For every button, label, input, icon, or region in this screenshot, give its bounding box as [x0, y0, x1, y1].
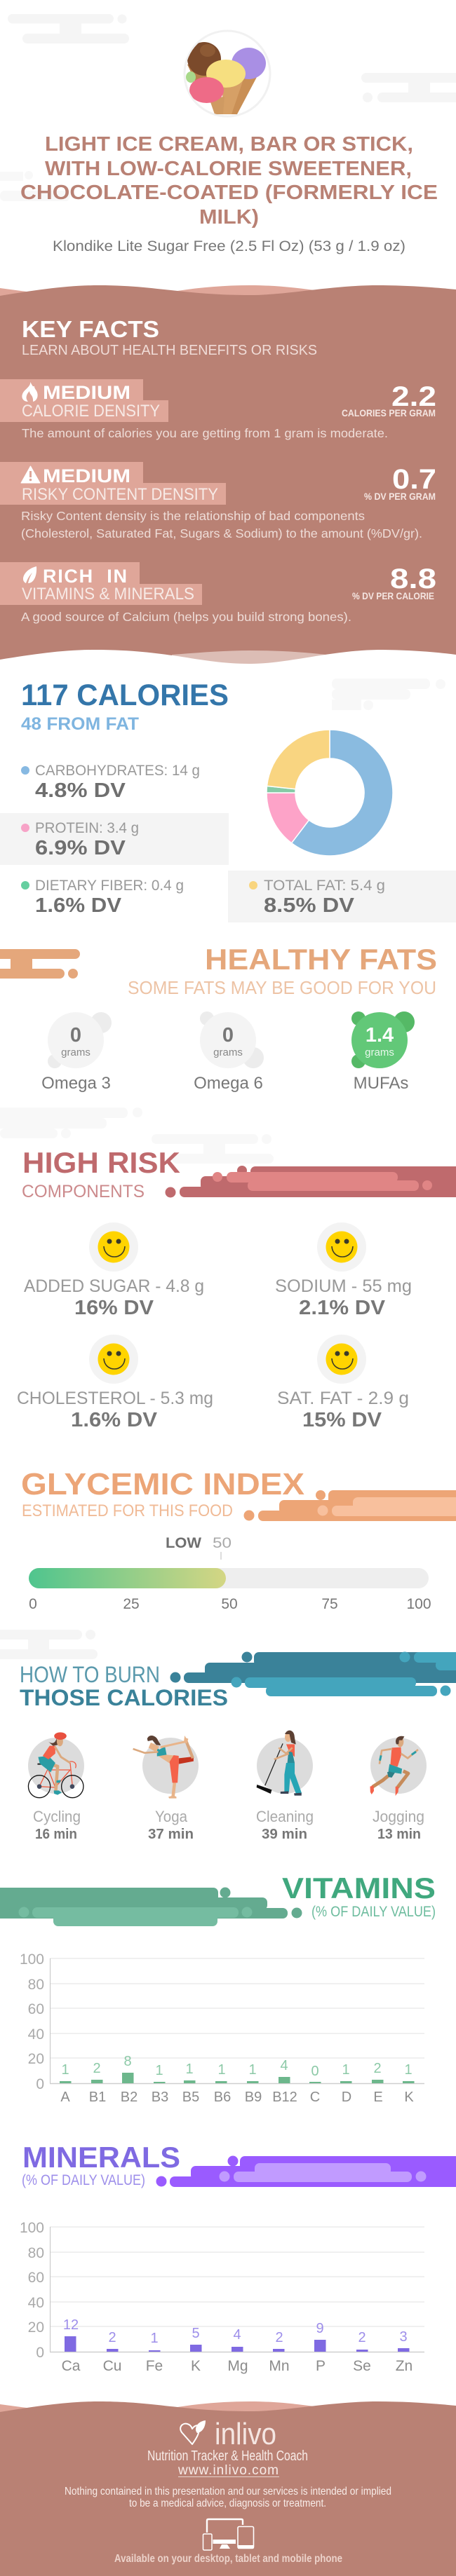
food photo: ice cream cones: [185, 31, 270, 116]
bar chart: vitamins: 60: [28, 2001, 44, 2017]
bar chart: minerals: Fe: [146, 2358, 163, 2374]
risk item: saturated fat: [277, 1335, 409, 1431]
fact: risky content density: 0.7: [392, 464, 436, 495]
availability note: Available on your desktop, tablet and mobile phone: [114, 2553, 342, 2565]
bar chart: vitamins: B1: [89, 2090, 106, 2105]
icon: yoga pose: [133, 1736, 199, 1799]
tagline: Nutrition Tracker & Health Coach: [147, 2448, 308, 2464]
risk item: added sugar: 16% DV: [74, 1297, 154, 1319]
fact: risky content density: MEDIUM: [43, 465, 130, 486]
bar chart: vitamins: 1: [404, 2062, 413, 2078]
bar chart: minerals: 0: [36, 2345, 44, 2361]
icon: warning triangle: [21, 466, 40, 483]
decorative band: burn: [170, 1651, 456, 1696]
fact: rich in vitamins and minerals: [0, 562, 436, 624]
fact: rich in vitamins and minerals: A good source of Calcium (helps you build strong bones).: [21, 610, 351, 624]
logo: inlivo: [180, 2417, 276, 2451]
bar chart: minerals: 2: [275, 2330, 283, 2345]
panel: key facts: [0, 285, 456, 673]
activity: cleaning: Cleaning: [256, 1808, 314, 1825]
bar chart: vitamins: D: [342, 2090, 351, 2105]
bar chart: vitamins: 2: [373, 2061, 382, 2076]
activity: cleaning: [256, 1731, 314, 1842]
risk item: added sugar: ADDED SUGAR - 4.8 g: [24, 1276, 204, 1296]
bar chart: vitamins: 1: [185, 2062, 194, 2077]
bar chart: minerals: Zn: [396, 2358, 413, 2374]
bar chart: minerals: 20: [28, 2319, 44, 2336]
bar chart: vitamins: B6: [214, 2090, 231, 2105]
bar chart: vitamins: 1: [217, 2062, 226, 2078]
decorative band: high risk: [166, 1166, 456, 1197]
stat: omega 3: Omega 3: [41, 1074, 111, 1093]
bar chart: vitamins: 1: [155, 2063, 163, 2078]
bar chart: minerals: 2: [108, 2330, 116, 2345]
panel: glycemic index: [21, 1467, 456, 1612]
subheading: 48 from fat: 48 FROM FAT: [21, 714, 139, 734]
disclaimer: to be a medical advice, diagnosis or treatment.: [129, 2497, 326, 2509]
bar chart: vitamins: 0: [311, 2064, 319, 2079]
fact: risky content density: RISKY CONTENT DENSITY: [22, 485, 218, 504]
bar chart: minerals: 2: [358, 2330, 366, 2345]
risk item: sodium: SODIUM - 55 mg: [275, 1276, 412, 1296]
heading: high risk: HIGH RISK: [22, 1146, 180, 1179]
bar chart: minerals: 4: [233, 2327, 241, 2343]
bar chart: minerals: 100: [20, 2220, 44, 2236]
disclaimer: [65, 2486, 391, 2509]
stat: omega 3: 0: [70, 1024, 81, 1047]
bar chart: vitamins: 1: [61, 2062, 69, 2078]
heading: how to burn those calories: [20, 1662, 228, 1710]
icon: smiley: [317, 1222, 366, 1272]
bar chart: vitamins: E: [373, 2090, 383, 2105]
website link: www.inlivo.com: [177, 2463, 279, 2478]
bar chart: vitamins: 8: [123, 2054, 132, 2069]
donut chart: macronutrients: [267, 730, 393, 856]
bar chart: minerals: 60: [28, 2270, 44, 2286]
activity: jogging: [370, 1736, 427, 1842]
subtitle: serving size: Klondike Lite Sugar Free (2.5 Fl Oz) (53 g / 1.9 oz): [53, 238, 405, 254]
legend: protein: PROTEIN: 3.4 g: [35, 820, 139, 836]
subheading: estimated: ESTIMATED FOR THIS FOOD: [22, 1501, 233, 1520]
marker: low 50: LOW: [166, 1535, 201, 1551]
bar chart: vitamins: 2: [93, 2061, 101, 2076]
bar chart: minerals: 40: [28, 2295, 44, 2311]
legend: carbohydrates: [21, 763, 200, 802]
disclaimer: Nothing contained in this presentation and our services is intended or implied: [65, 2486, 391, 2497]
activity: jogging: Jogging: [373, 1808, 424, 1825]
subheading: learn about health: LEARN ABOUT HEALTH BENEFITS OR RISKS: [22, 343, 317, 358]
fact: rich in vitamins and minerals: % DV PER CALORIE: [352, 590, 434, 601]
fact: risky content density: (Cholesterol, Saturated Fat, Sugars & Sodium) to the amount (%DV/gr).: [21, 526, 422, 540]
marker: low 50: [166, 1535, 232, 1560]
activity: cycling: Cycling: [33, 1808, 81, 1825]
icon: devices: [203, 2519, 254, 2550]
marker: low 50: 50: [213, 1535, 232, 1551]
gauge scale: 25: [123, 1596, 140, 1612]
gauge bar: [29, 1568, 429, 1588]
title: WITH LOW-CALORIE SWEETENER,: [45, 158, 412, 180]
activity: yoga: Yoga: [155, 1808, 188, 1825]
bar chart: minerals: Cu: [103, 2358, 121, 2374]
fact: risky content density: % DV PER GRAM: [364, 491, 436, 502]
risk item: saturated fat: SAT. FAT - 2.9 g: [277, 1389, 409, 1408]
heading: 117 calories: 117 CALORIES: [21, 679, 229, 712]
stat: mufas: [351, 1011, 415, 1093]
fact: rich in vitamins and minerals: RICH IN: [43, 566, 127, 587]
gauge scale: [29, 1596, 431, 1612]
bar chart: vitamins: A: [60, 2090, 70, 2105]
risk item: saturated fat: 15% DV: [302, 1409, 382, 1431]
legend: protein: [0, 813, 229, 865]
bar chart: vitamins: 0: [36, 2076, 44, 2092]
title: CHOCOLATE-COATED (FORMERLY ICE: [20, 182, 438, 204]
subheading: components: COMPONENTS: [22, 1182, 145, 1201]
bar chart: minerals: [20, 2220, 424, 2374]
panel: high risk components: [17, 1146, 456, 1431]
subheading: some fats may be good: SOME FATS MAY BE GOOD FOR YOU: [128, 977, 436, 998]
subheading: percent of daily value: (% OF DAILY VALUE): [311, 1904, 436, 1920]
bar chart: minerals: 12: [63, 2317, 79, 2333]
bar chart: minerals: Ca: [62, 2358, 81, 2374]
icon: runner: [370, 1736, 427, 1796]
activity: cleaning: 39 min: [262, 1827, 307, 1842]
bar chart: minerals: 3: [399, 2329, 408, 2345]
fact: rich in vitamins and minerals: VITAMINS & MINERALS: [22, 585, 194, 604]
logo: inlivo: inlivo: [215, 2417, 276, 2451]
bar chart: vitamins: K: [404, 2090, 414, 2105]
legend: carbohydrates: 4.8% DV: [35, 779, 126, 802]
bar chart: minerals: 1: [150, 2331, 159, 2346]
bar chart: vitamins: 1: [248, 2062, 257, 2078]
fact: calorie density: 2.2: [391, 381, 436, 412]
decorative band: glycemic: [244, 1490, 456, 1521]
fact: risky content density: Risky Content density is the relationship of bad components: [21, 509, 365, 523]
title: LIGHT ICE CREAM, BAR OR STICK,: [45, 133, 413, 156]
stat: omega 6: 0: [222, 1024, 234, 1047]
risk item: cholesterol: CHOLESTEROL - 5.3 mg: [17, 1389, 213, 1408]
legend: dietary fiber: DIETARY FIBER: 0.4 g: [35, 878, 184, 894]
fact: rich in vitamins and minerals: 8.8: [390, 564, 436, 594]
stat: omega 6: Omega 6: [194, 1074, 263, 1093]
subheading: percent of daily value: (% OF DAILY VALUE): [22, 2172, 145, 2188]
heading: healthy fats: HEALTHY FATS: [205, 943, 437, 976]
bar chart: minerals: Se: [353, 2358, 371, 2374]
panel: how to burn: [20, 1651, 456, 1842]
bar chart: vitamins: B12: [272, 2090, 297, 2105]
bar chart: minerals: 80: [28, 2245, 44, 2261]
bar chart: vitamins: 40: [28, 2026, 44, 2043]
stat: mufas: MUFAs: [354, 1074, 408, 1093]
icon: smiley: [89, 1335, 138, 1384]
legend: total fat: [228, 871, 456, 922]
bar chart: vitamins: 100: [20, 1951, 44, 1968]
panel: vitamins: [0, 1872, 436, 2105]
bar chart: minerals: 9: [316, 2321, 324, 2336]
bar chart: vitamins: B9: [245, 2090, 262, 2105]
fact: calorie density: CALORIE DENSITY: [22, 402, 160, 421]
stat: mufas: grams: [365, 1047, 394, 1058]
heading: minerals: MINERALS: [22, 2141, 180, 2174]
panel: minerals: [20, 2141, 456, 2374]
bar chart: vitamins: 4: [280, 2058, 288, 2073]
gauge scale: 0: [29, 1596, 37, 1612]
legend: total fat: 8.5% DV: [264, 894, 355, 917]
bar chart: vitamins: 80: [28, 1977, 44, 1993]
panel: healthy fats: [0, 943, 437, 1093]
fact: calorie density: MEDIUM: [43, 382, 130, 403]
bar chart: vitamins: B2: [121, 2090, 138, 2105]
panel: footer: [0, 2401, 456, 2576]
bar chart: vitamins: [20, 1951, 424, 2105]
stat: omega 6: [194, 1011, 264, 1093]
icon: cyclist: [28, 1732, 84, 1798]
activity: yoga: [133, 1736, 199, 1842]
risk item: sodium: [275, 1222, 412, 1319]
bar chart: vitamins: B5: [182, 2090, 199, 2105]
legend: total fat: TOTAL FAT: 5.4 g: [264, 878, 385, 894]
gauge scale: 100: [406, 1596, 431, 1612]
stat: omega 3: grams: [61, 1047, 90, 1058]
fact: risky content density: [0, 462, 436, 540]
stat: omega 6: grams: [213, 1047, 243, 1058]
fact: calorie density: CALORIES PER GRAM: [342, 407, 436, 418]
gauge scale: 50: [221, 1596, 238, 1612]
activity: jogging: 13 min: [377, 1827, 421, 1842]
bar chart: minerals: Mg: [227, 2358, 248, 2374]
icon: smiley: [317, 1335, 366, 1384]
gauge scale: 75: [321, 1596, 338, 1612]
icon: smiley: [89, 1222, 138, 1272]
risk item: sodium: 2.1% DV: [299, 1297, 386, 1319]
title: MILK): [199, 206, 259, 229]
legend: dietary fiber: 1.6% DV: [35, 894, 122, 917]
legend: dietary fiber: [21, 878, 184, 917]
bar chart: vitamins: B3: [152, 2090, 168, 2105]
risk item: added sugar: [24, 1222, 204, 1319]
icon: flame: [22, 382, 38, 402]
risk item: cholesterol: [17, 1335, 213, 1431]
bar chart: vitamins: C: [310, 2090, 320, 2105]
bar chart: minerals: 5: [192, 2326, 200, 2341]
heading: how to burn those calories: THOSE CALORIES: [20, 1685, 228, 1710]
legend: carbohydrates: CARBOHYDRATES: 14 g: [35, 763, 200, 779]
bar chart: vitamins: 20: [28, 2051, 44, 2067]
icon: person sweeping: [257, 1731, 313, 1796]
activity: cycling: [28, 1732, 84, 1842]
decorative band: healthy fats: [0, 949, 80, 979]
bar chart: minerals: Mn: [269, 2358, 290, 2374]
decorative band: vitamins: [0, 1887, 302, 1926]
fact: calorie density: [0, 379, 436, 440]
stat: mufas: 1.4: [366, 1024, 394, 1047]
icon: leaf: [23, 566, 36, 583]
decorative band: minerals: [156, 2156, 456, 2187]
bar chart: minerals: K: [191, 2358, 201, 2374]
heading: vitamins: VITAMINS: [282, 1872, 436, 1904]
stat: omega 3: [41, 1012, 112, 1093]
activity: cycling: 16 min: [35, 1827, 77, 1842]
heading: how to burn those calories: HOW TO BURN: [20, 1662, 160, 1687]
legend: protein: 6.9% DV: [35, 837, 126, 859]
title: [20, 133, 438, 229]
risk item: cholesterol: 1.6% DV: [71, 1409, 158, 1431]
bar chart: minerals: P: [316, 2358, 326, 2374]
panel: calories: [0, 679, 456, 922]
bar chart: vitamins: 1: [342, 2062, 350, 2078]
heading: glycemic index: GLYCEMIC INDEX: [21, 1467, 304, 1501]
heading: key facts: KEY FACTS: [22, 316, 159, 342]
fact: calorie density: The amount of calories you are getting from 1 gram is moderate.: [22, 426, 388, 440]
activity: yoga: 37 min: [148, 1827, 194, 1842]
